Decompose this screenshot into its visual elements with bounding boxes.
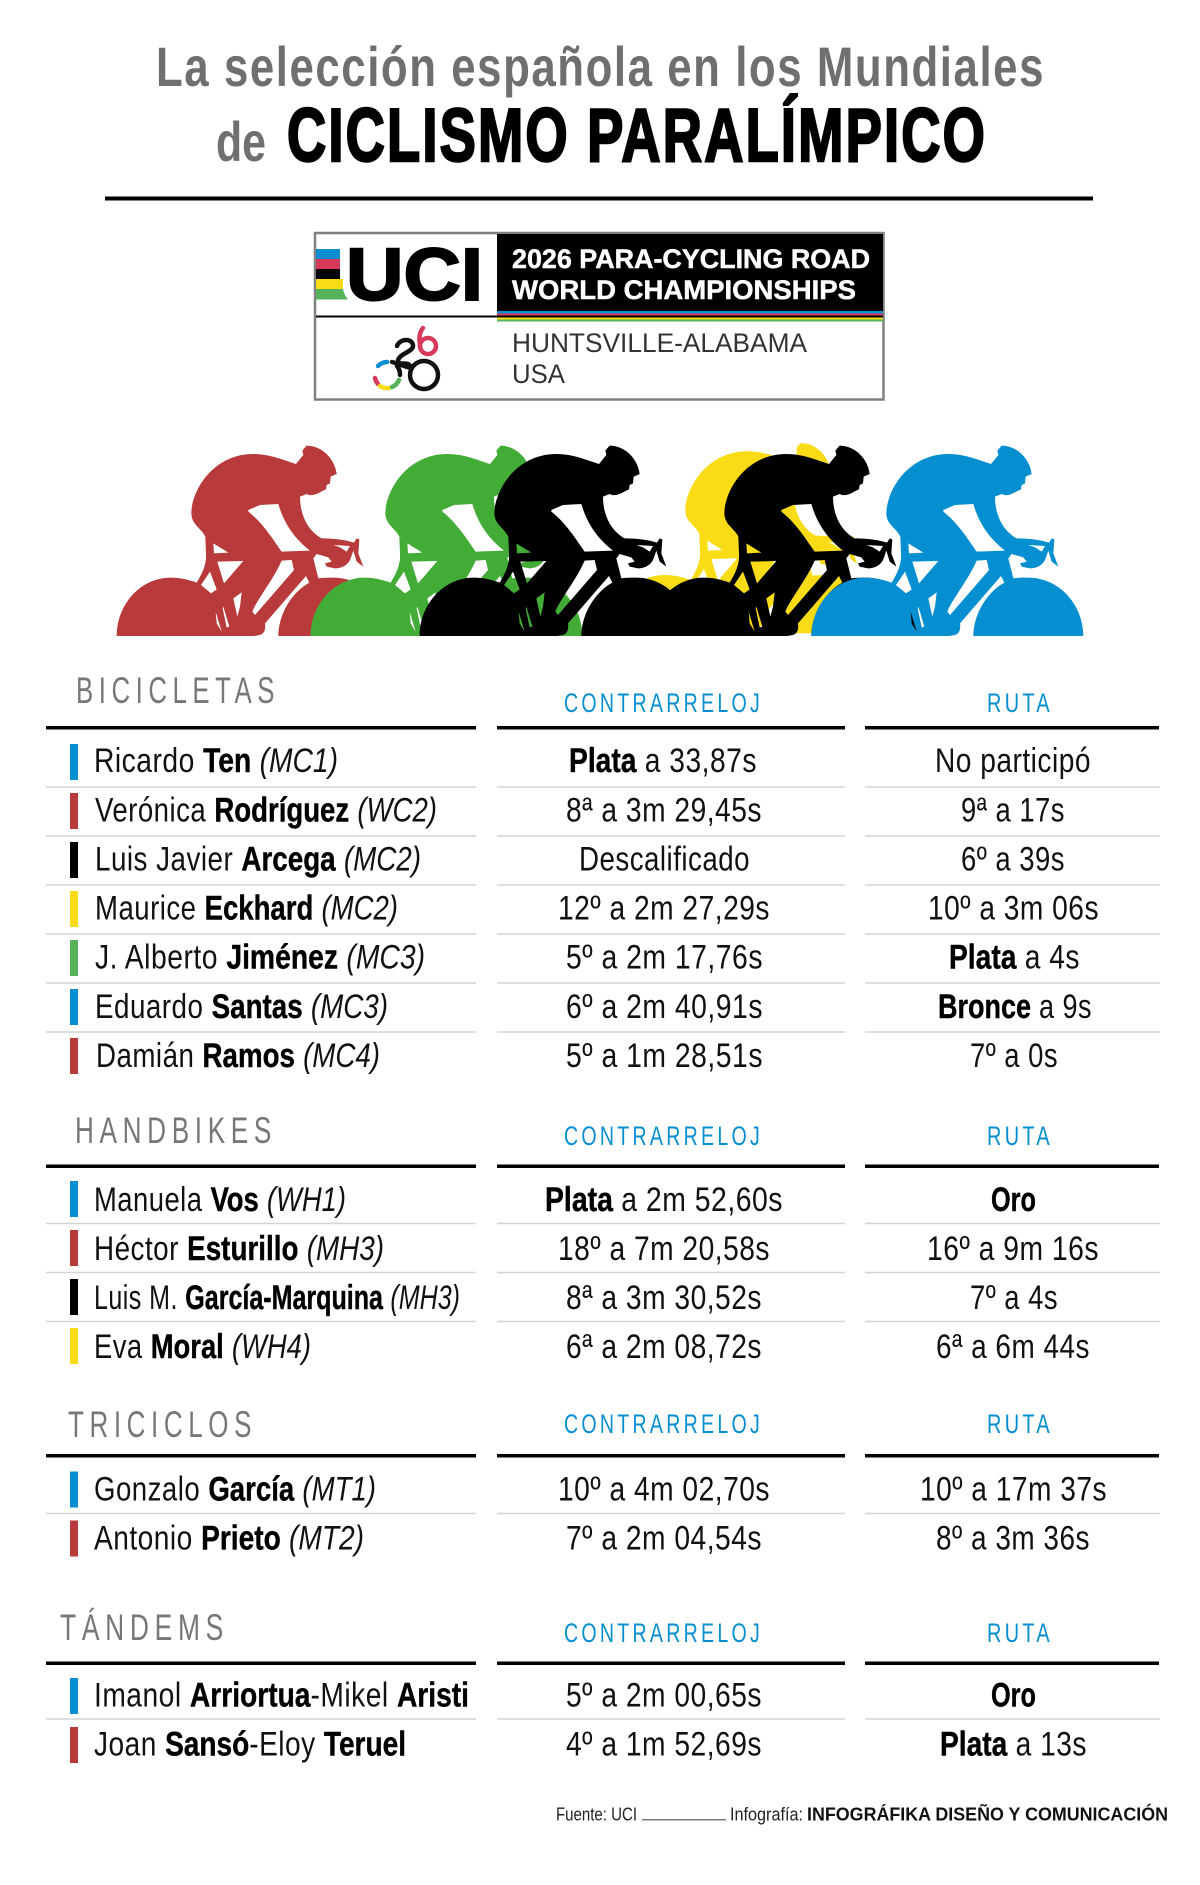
row: Maurice Eckhard: 12º a 2m 27,29s bbox=[558, 890, 770, 928]
row: Sansó-Teruel: Plata a 13s bbox=[940, 1726, 1087, 1764]
row: Manuela Vos: Plata a 2m 52,60s bbox=[545, 1181, 783, 1219]
row: Verónica Rodríguez bbox=[70, 792, 1065, 830]
column header: ruta: RUTA bbox=[987, 1121, 1053, 1151]
row: Gonzalo García: 10º a 17m 37s bbox=[920, 1470, 1107, 1508]
row: Verónica Rodríguez: 8ª a 3m 29,45s bbox=[566, 792, 762, 830]
row: Arriortua-Aristi: Oro bbox=[991, 1676, 1036, 1714]
row: Ricardo Ten: No participó bbox=[935, 742, 1091, 780]
row: Maurice Eckhard: 10º a 3m 06s bbox=[928, 890, 1099, 928]
column header: contrarreloj: CONTRARRELOJ bbox=[564, 688, 763, 718]
heading: bicicletas: BICICLETAS bbox=[76, 670, 280, 711]
column header: contrarreloj: CONTRARRELOJ bbox=[564, 1121, 763, 1151]
heading: tándems: TÁNDEMS bbox=[60, 1607, 229, 1648]
row: Manuela Vos bbox=[70, 1181, 1036, 1219]
row: Damián Ramos: 7º a 0s bbox=[970, 1037, 1058, 1075]
row: Eduardo Santas: Bronce a 9s bbox=[938, 988, 1092, 1026]
row: Damián Ramos: Damián Ramos (MC4) bbox=[96, 1037, 380, 1075]
column header: ruta: RUTA bbox=[987, 1618, 1053, 1648]
yellow cyclist bbox=[611, 443, 882, 633]
row: Héctor Esturillo: 16º a 9m 16s bbox=[927, 1230, 1099, 1268]
row: J. Alberto Jiménez: J. Alberto Jiménez (MC3) bbox=[95, 938, 425, 976]
UCI championship logo bbox=[315, 233, 884, 400]
row: Antonio Prieto: 7º a 2m 04,54s bbox=[566, 1520, 762, 1558]
row: Héctor Esturillo bbox=[70, 1230, 1099, 1268]
title word: de: de bbox=[216, 110, 266, 173]
row: Eduardo Santas: Eduardo Santas (MC3) bbox=[95, 988, 388, 1026]
row: Eduardo Santas: 6º a 2m 40,91s bbox=[566, 988, 763, 1026]
row: Luis M. García-Marquina: 8ª a 3m 30,52s bbox=[566, 1279, 762, 1317]
footer: source and credit: Infografía: bbox=[730, 1804, 803, 1824]
row: Manuela Vos: Oro bbox=[991, 1181, 1036, 1219]
row: Maurice Eckhard bbox=[70, 890, 1099, 928]
column header: contrarreloj: CONTRARRELOJ bbox=[564, 1409, 763, 1439]
championship name: 2026 PARA-CYCLING ROAD bbox=[512, 244, 870, 274]
green cyclist bbox=[311, 446, 582, 636]
row: Eva Moral bbox=[70, 1328, 1090, 1366]
row: Sansó-Teruel bbox=[70, 1726, 1087, 1764]
row: J. Alberto Jiménez: Plata a 4s bbox=[949, 938, 1080, 976]
row: Verónica Rodríguez: 9ª a 17s bbox=[961, 792, 1065, 830]
row: Sansó-Teruel: 4º a 1m 52,69s bbox=[566, 1726, 762, 1764]
row: Verónica Rodríguez: Verónica Rodríguez (WC2) bbox=[95, 792, 437, 830]
row: Luis M. García-Marquina: 7º a 4s bbox=[970, 1279, 1058, 1317]
blue cyclist bbox=[812, 446, 1083, 636]
location: HUNTSVILLE-ALABAMA bbox=[512, 328, 807, 358]
footer: source and credit: Fuente: UCI bbox=[556, 1804, 637, 1824]
row: Arriortua-Aristi: 5º a 2m 00,65s bbox=[566, 1676, 762, 1714]
row: Arriortua-Aristi: Imanol Arriortua-Mikel Aristi bbox=[94, 1676, 469, 1714]
icon: 26 bike bbox=[375, 328, 438, 389]
row: J. Alberto Jiménez bbox=[70, 938, 1080, 976]
row: Damián Ramos: 5º a 1m 28,51s bbox=[566, 1037, 763, 1075]
column header: ruta: RUTA bbox=[987, 688, 1053, 718]
row: Luis Javier Arcega: Luis Javier Arcega (MC2) bbox=[95, 840, 421, 878]
UCI championship logo: WORLD CHAMPIONSHIPS bbox=[512, 275, 856, 305]
row: Luis M. García-Marquina bbox=[70, 1279, 1058, 1317]
row: Héctor Esturillo: Héctor Esturillo (MH3) bbox=[94, 1230, 384, 1268]
black cyclist bbox=[420, 446, 691, 636]
row: Damián Ramos bbox=[70, 1037, 1058, 1075]
black title block bbox=[497, 234, 883, 311]
row: Antonio Prieto: Antonio Prieto (MT2) bbox=[94, 1520, 364, 1558]
row: Eva Moral: Eva Moral (WH4) bbox=[94, 1328, 311, 1366]
title bbox=[156, 35, 1045, 177]
red cyclist bbox=[117, 446, 388, 636]
row: J. Alberto Jiménez: 5º a 2m 17,76s bbox=[566, 938, 763, 976]
row: Luis M. García-Marquina: Luis M. García-Marquina (MH3) bbox=[94, 1279, 460, 1317]
UCI championship logo: USA bbox=[512, 359, 565, 389]
row: Gonzalo García: 10º a 4m 02,70s bbox=[558, 1470, 770, 1508]
panel: tándems bbox=[46, 1607, 1160, 1764]
heading: handbikes: HANDBIKES bbox=[75, 1110, 277, 1151]
row: Ricardo Ten: Plata a 33,87s bbox=[569, 742, 757, 780]
panel: handbikes bbox=[46, 1110, 1160, 1366]
column header: ruta: RUTA bbox=[987, 1409, 1053, 1439]
row: Eva Moral: 6ª a 2m 08,72s bbox=[566, 1328, 762, 1366]
footer: source and credit bbox=[556, 1804, 1168, 1824]
row: Manuela Vos: Manuela Vos (WH1) bbox=[94, 1181, 346, 1219]
footer: source and credit: INFOGRÁFIKA DISEÑO Y COMUNICACIÓN bbox=[807, 1804, 1168, 1824]
black cyclist 2 bbox=[650, 446, 921, 636]
row: Eva Moral: 6ª a 6m 44s bbox=[936, 1328, 1090, 1366]
row: Antonio Prieto bbox=[70, 1520, 1090, 1558]
panel: bicicletas bbox=[46, 670, 1160, 1075]
illustration: six cyclists bbox=[117, 443, 1083, 636]
row: Gonzalo García: Gonzalo García (MT1) bbox=[94, 1470, 376, 1508]
row: Maurice Eckhard: Maurice Eckhard (MC2) bbox=[95, 890, 398, 928]
row: Luis Javier Arcega bbox=[70, 840, 1065, 878]
row: Arriortua-Aristi bbox=[70, 1676, 1036, 1714]
row: Eduardo Santas bbox=[70, 988, 1092, 1026]
row: Antonio Prieto: 8º a 3m 36s bbox=[936, 1520, 1090, 1558]
rainbow stripes bbox=[316, 249, 348, 300]
column header: contrarreloj: CONTRARRELOJ bbox=[564, 1618, 763, 1648]
row: Gonzalo García bbox=[70, 1470, 1107, 1508]
heading: triciclos: TRICICLOS bbox=[68, 1404, 257, 1445]
panel: triciclos bbox=[46, 1404, 1160, 1558]
row: Luis Javier Arcega: 6º a 39s bbox=[961, 840, 1065, 878]
UCI wordmark: UCI bbox=[346, 233, 483, 316]
row: Héctor Esturillo: 18º a 7m 20,58s bbox=[558, 1230, 770, 1268]
row: Ricardo Ten: Ricardo Ten (MC1) bbox=[94, 742, 338, 780]
row: Luis Javier Arcega: Descalificado bbox=[579, 840, 750, 878]
row: Ricardo Ten bbox=[70, 742, 1091, 780]
row: Sansó-Teruel: Joan Sansó-Eloy Teruel bbox=[94, 1726, 406, 1764]
